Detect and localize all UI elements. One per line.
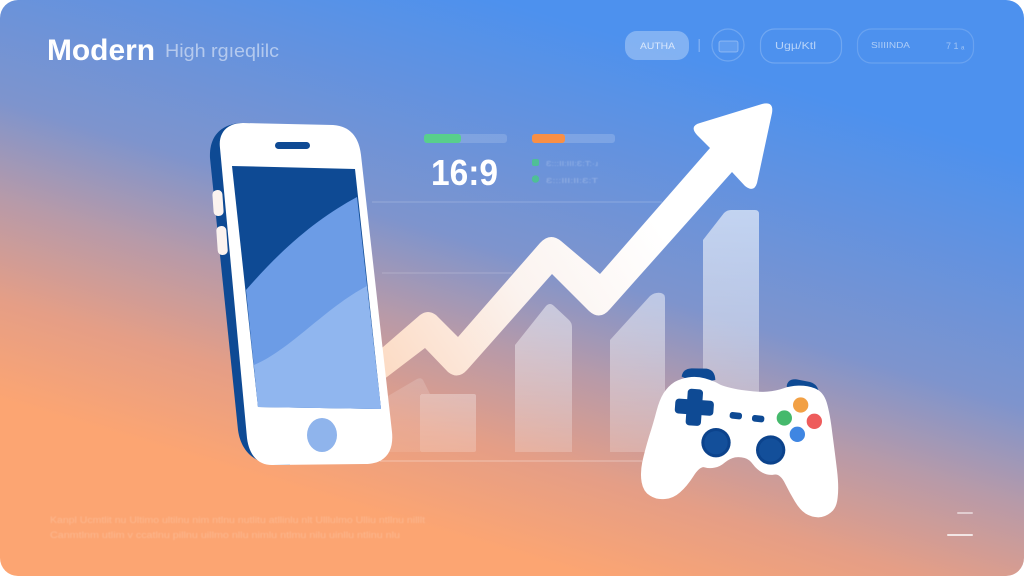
title: Modern (47, 34, 155, 67)
phone speaker (275, 142, 310, 149)
legend: list (532, 134, 615, 185)
nav button: active (625, 31, 689, 60)
footer dashes (947, 512, 973, 536)
footer line two: Canmtlnm utlim v ccatlnu pillnu uillmo nllu nimlu ntlmu nilu uinllu ntlinu nlu (50, 530, 400, 540)
legend item one: Ɛ:::II:III:Ɛ:T:·ɹ (546, 161, 598, 168)
controller d-pad (674, 388, 715, 427)
nav button: wide outline: SIIIINDA (871, 41, 911, 50)
controller centre buttons (729, 412, 765, 423)
progress bar: orange (532, 134, 615, 143)
bar: back small (388, 378, 430, 452)
phone side buttons (212, 190, 228, 255)
phone back edge (210, 123, 290, 465)
bar: fourth (703, 210, 759, 410)
nav button: wide outline: 7 1 ₐ (946, 41, 965, 51)
nav button: wide outline (858, 29, 974, 63)
phone screen (232, 166, 381, 409)
bar: first (420, 394, 476, 452)
value: 16:9: 16:9 (431, 152, 498, 193)
nav icon: screen (698, 29, 744, 61)
nav button: active: AUTHA (640, 41, 675, 51)
nav button: outline (760, 29, 842, 63)
footer line one: Kanpl Ucmtlit nu Ultimo ultilnu nim ntlnu nutlitu atllinlu nlt Ulllulmo Ulliu ntllnu nilllt (50, 515, 426, 525)
controller left stick (701, 428, 731, 457)
phone body (220, 123, 392, 465)
controller action buttons (777, 397, 822, 442)
bar: second (515, 304, 572, 452)
navigation bar (625, 29, 974, 63)
growth arrow (375, 103, 772, 386)
icon: game controller (641, 368, 838, 517)
footer text (50, 515, 426, 540)
legend: ratio stat (424, 134, 507, 193)
chart grid lines (372, 202, 662, 461)
subtitle: High rgıeqlilc (165, 41, 279, 61)
controller body (641, 377, 838, 517)
controller right stick (756, 435, 785, 465)
controller bumpers (682, 368, 819, 393)
bar: third (610, 293, 665, 452)
icon: smartphone (210, 123, 392, 465)
phone home button (307, 418, 337, 452)
bar chart (388, 210, 759, 452)
legend item two: Ɛ:::III:II:Ɛ:T (546, 178, 599, 185)
nav button: outline: Ugµ/Ktl (775, 41, 816, 52)
progress bar: green (424, 134, 507, 143)
